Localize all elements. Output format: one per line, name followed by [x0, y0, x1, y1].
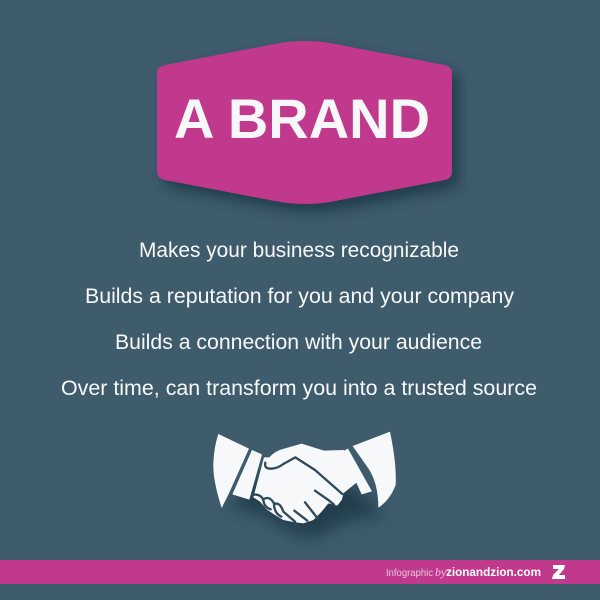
left sleeve — [213, 434, 249, 508]
benefit 4: Over time, can transform you into a trusted source — [61, 377, 537, 400]
icon: handshake — [213, 432, 396, 537]
footer bar: zionandzion.com — [446, 565, 541, 579]
benefits text list — [61, 239, 537, 400]
footer bar — [0, 560, 600, 584]
left cuff — [232, 450, 262, 500]
benefit 1: Makes your business recognizable — [139, 239, 459, 262]
title badge — [157, 41, 459, 212]
right cuff — [344, 449, 372, 494]
title: A BRAND — [174, 87, 430, 150]
right sleeve — [353, 432, 396, 508]
footer credit: Infographic — [386, 567, 433, 579]
logo: Z — [552, 565, 565, 579]
handshake lines — [253, 457, 342, 522]
footer bar: by — [435, 565, 447, 579]
benefit 2: Builds a reputation for you and your company — [85, 285, 514, 308]
benefit 3: Builds a connection with your audience — [115, 331, 482, 354]
clasped hands — [253, 444, 357, 523]
